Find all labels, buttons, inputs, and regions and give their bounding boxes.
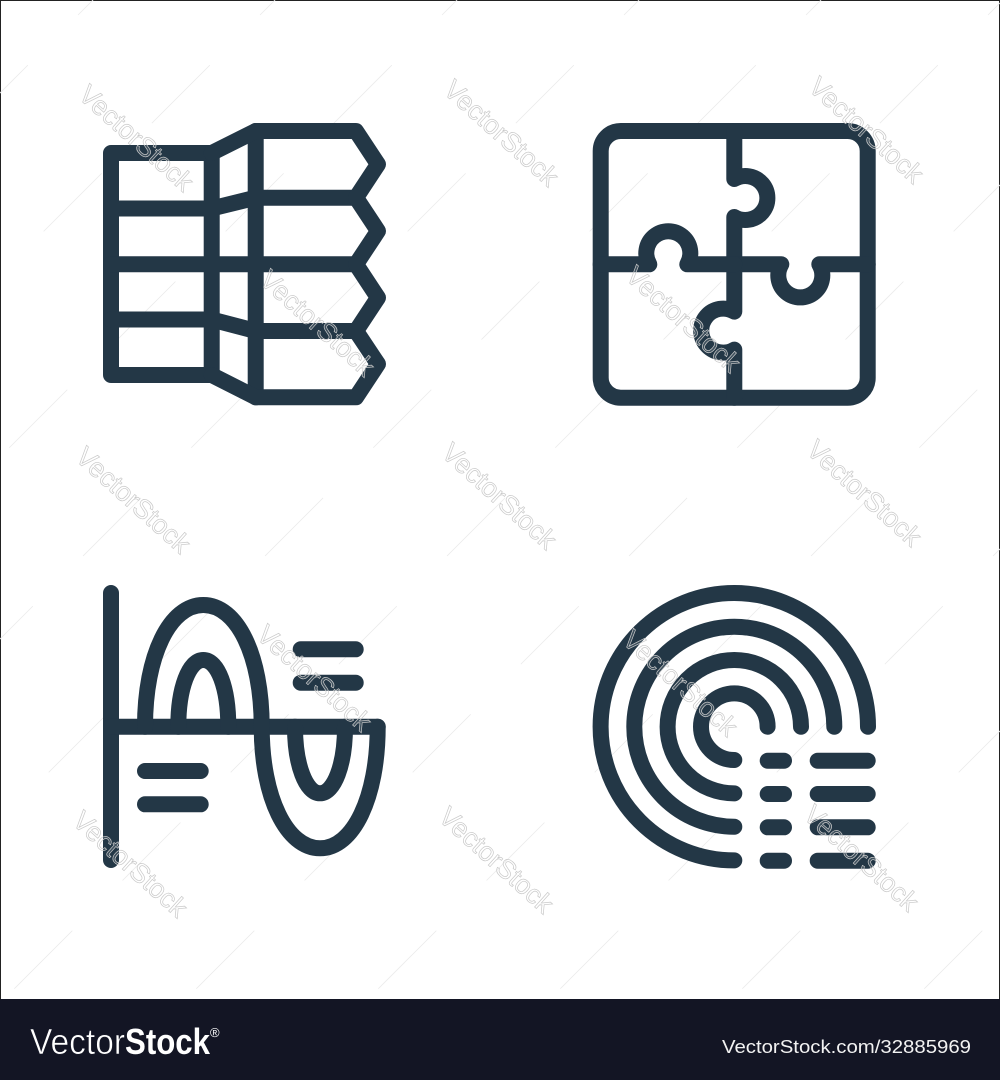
- icon: four-piece puzzle: [601, 131, 868, 398]
- watermark text: VectorStock: [620, 260, 747, 378]
- watermark text: VectorStock: [254, 264, 381, 382]
- footer bar: [0, 999, 1000, 1080]
- watermark text: VectorStock: [251, 619, 378, 737]
- watermark text: [67, 71, 930, 923]
- watermark text: VectorStock: [798, 799, 925, 917]
- watermark text: VectorStock: [438, 74, 565, 192]
- watermark text: VectorStock: [67, 805, 194, 923]
- watermark text: VectorStock: [801, 434, 928, 552]
- watermark text: VectorStock: [70, 441, 197, 559]
- watermark text: VectorStock: [617, 624, 744, 742]
- footer image id: VectorStock.com/32885969: [722, 1036, 971, 1057]
- watermark text: VectorStock: [73, 79, 200, 197]
- footer logo: ®: [210, 1025, 220, 1040]
- icon: sine wave chart: [111, 593, 378, 860]
- footer logo: Stock: [125, 1021, 211, 1062]
- watermark text: VectorStock: [803, 71, 930, 189]
- icon: radial bar chart with legend: [601, 593, 868, 861]
- icon: layered table with arrow tabs: [111, 131, 378, 397]
- watermark text: VectorStock: [433, 801, 560, 919]
- footer logo: [30, 1021, 220, 1062]
- footer logo: Vector: [30, 1021, 125, 1062]
- watermark text: VectorStock: [436, 437, 563, 555]
